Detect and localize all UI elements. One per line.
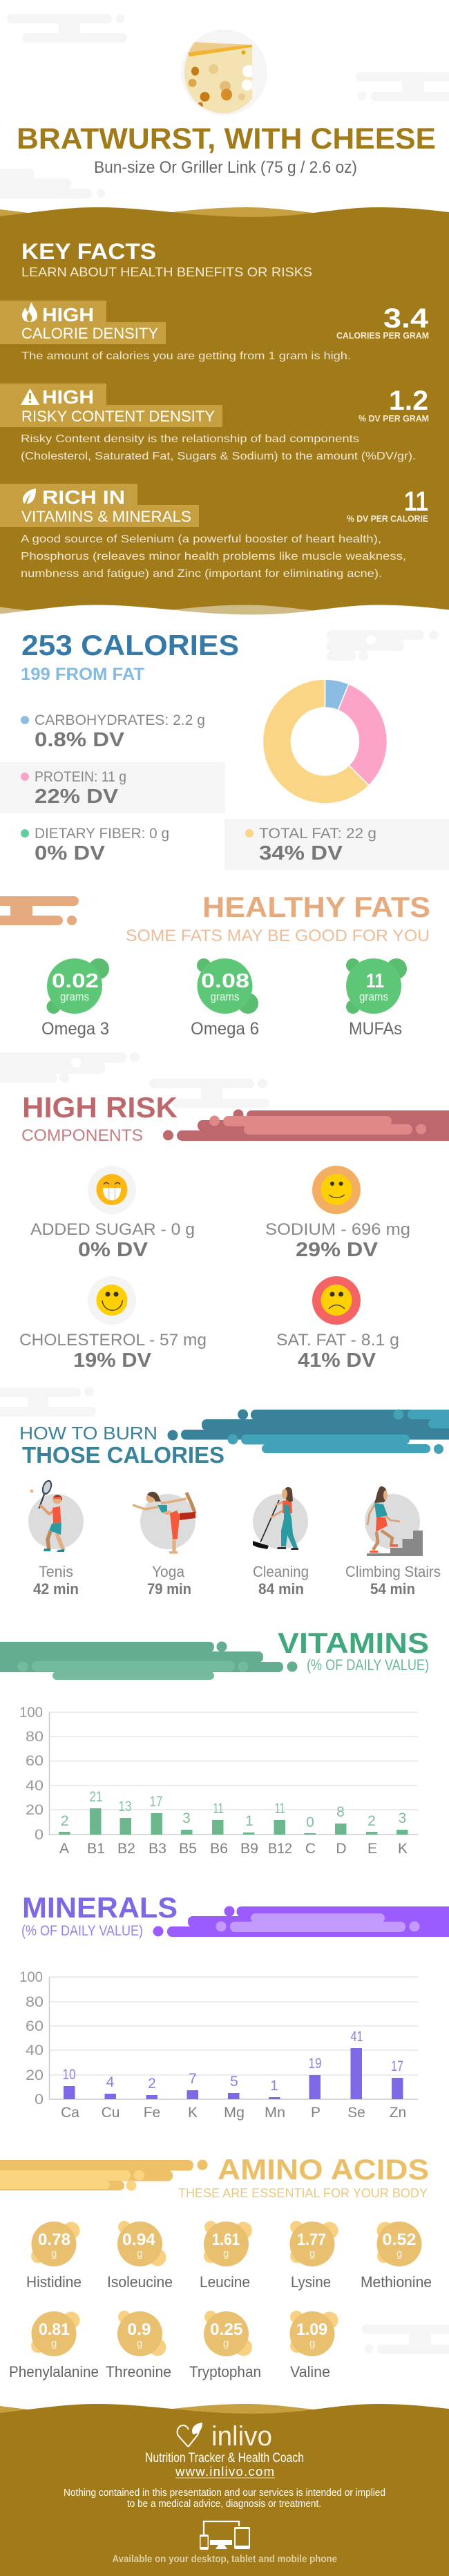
bar chart: minerals: 2 [148,2076,156,2092]
decorative blob [167,1410,449,1454]
item: sodium [265,1166,410,1261]
bar chart: minerals: Fe [144,2105,160,2121]
bar chart: minerals: 80 [26,1994,44,2010]
heading: those calories: THOSE CALORIES [22,1442,224,1468]
badge: leucine: Leucine [200,2273,250,2291]
bar chart: vitamins: 80 [26,1729,44,1745]
activity: cleaning [253,1487,308,1550]
bar chart: vitamins: E [367,1841,377,1857]
legend: protein [0,762,225,813]
bar chart: minerals: Se [347,2105,365,2121]
subheading: components: COMPONENTS [21,1126,143,1145]
heading: calories: 253 CALORIES [21,629,239,661]
bar chart: vitamins: 11 [275,1801,285,1817]
value: 11: 11 [404,486,428,517]
badge: lysine: Lysine [291,2273,331,2291]
subheading: from fat: 199 FROM FAT [21,665,144,684]
value: 3.4: 3.4 [383,303,429,334]
description [21,433,416,462]
icon: warning triangle [21,388,39,405]
subheading: THESE ARE ESSENTIAL FOR YOUR BODY [178,2186,428,2200]
subheading: LEARN ABOUT HEALTH BENEFITS OR RISKS [21,265,312,279]
bar chart: vitamins: B2 [117,1841,135,1857]
decorative blob [153,1906,449,1937]
bar chart: minerals: 10 [62,2067,76,2083]
badge: histidine: 0.78 [38,2231,70,2249]
panel: vitamins [0,1627,429,1857]
logo: inlivo [178,2421,272,2452]
badge: tryptophan: g [223,2338,229,2349]
badge: methionine [361,2222,432,2291]
badge: isoleucine [107,2221,173,2291]
subheading: daily value: (% OF DAILY VALUE) [21,1923,143,1939]
badge: omega 6 [191,958,259,1039]
labels: activity names and minutes: 42 min [33,1580,79,1598]
bar chart: minerals: 40 [26,2043,44,2058]
title: BRATWURST, WITH CHEESE [17,122,436,155]
badge: omega 3: grams [60,990,89,1003]
bar chart: vitamins: 40 [26,1778,44,1794]
panel: key facts [0,207,449,626]
bar chart: vitamins: B1 [87,1841,105,1857]
panel: healthy fats [0,891,430,1039]
fact: risky content density: HIGH [42,386,94,408]
badge: methionine: g [397,2248,402,2260]
legend: dietary fiber: DIETARY FIBER: 0 g [35,826,169,842]
description [21,533,406,580]
labels: activity names and minutes [33,1563,441,1598]
badge: MUFAs: 11 [366,970,384,992]
badge: threonine [106,2311,171,2380]
activity: tennis [28,1479,84,1552]
bar chart: vitamins: B6 [210,1841,228,1857]
badge: threonine: Threonine [106,2363,171,2380]
bar chart: vitamins: 100 [19,1705,43,1721]
bar chart: vitamins: 21 [90,1789,102,1805]
badge: isoleucine: 0.94 [122,2231,156,2249]
fact: calorie density: CALORIE DENSITY [21,325,158,342]
bar chart: vitamins: 20 [26,1802,44,1818]
badge: omega 6: 0.08 [201,970,249,992]
badge: valine: 1.09 [296,2320,327,2339]
labels: activity names and minutes: 84 min [258,1580,304,1598]
badge: leucine: 1.61 [212,2231,240,2249]
bar chart: vitamins: 0 [35,1827,44,1843]
item: saturated fat [276,1276,399,1372]
legend: carbohydrates [21,712,205,751]
item: cholesterol: CHOLESTEROL - 57 mg [19,1331,207,1349]
badge: phenylalanine [9,2311,99,2380]
disclaimer: Nothing contained in this presentation and our services is intended or implied [64,2487,385,2499]
item: added sugar [30,1166,195,1261]
item: cholesterol: 19% DV [73,1349,152,1372]
heading: amino acids: AMINO ACIDS [218,2153,429,2186]
item: saturated fat: 41% DV [298,1349,376,1372]
badge: MUFAs [346,958,407,1039]
bar chart: minerals: 1 [270,2078,278,2094]
bar chart: vitamins [19,1705,418,1857]
disclaimer: to be a medical advice, diagnosis or treatment. [127,2498,321,2510]
legend: dietary fiber [21,826,169,864]
description: Phosphorus (releaves minor health problems like muscle weakness, [21,551,406,562]
bar chart: vitamins: 3 [182,1810,191,1826]
description: (Cholesterol, Saturated Fat, Sugars & Sodium) to the amount (%DV/gr). [21,451,416,462]
badge: valine: Valine [290,2363,330,2380]
bar chart: vitamins: B5 [179,1841,197,1857]
badge: lysine [290,2221,338,2291]
panel: footer [0,2404,449,2576]
bar chart: minerals: Zn [390,2105,406,2121]
icon: devices [200,2521,250,2550]
legend: dietary fiber: 0% DV [35,842,106,864]
item: sodium: SODIUM - 696 mg [265,1220,410,1239]
fact: risky content density: % DV PER GRAM [359,413,429,424]
panel: amino acids [0,2153,432,2380]
legend: carbohydrates: 0.8% DV [35,729,125,751]
badge: methionine: Methionine [361,2273,432,2291]
fact: rich in vitamins and minerals: % DV PER CALORIE [347,513,428,524]
description: A good source of Selenium (a powerful booster of heart health), [21,533,381,545]
decorative blob [163,1110,449,1141]
labels: activity names and minutes: Climbing Stairs [345,1563,441,1580]
bar chart: minerals: 7 [189,2071,197,2087]
fact: calorie density [0,301,429,362]
badge: threonine: g [137,2338,142,2349]
activity: yoga [133,1492,195,1553]
heading: key facts: KEY FACTS [21,239,156,264]
decorative blob [0,896,79,925]
bar chart: vitamins: B9 [240,1841,258,1857]
badge: isoleucine: g [137,2248,142,2260]
bar chart: minerals: 60 [26,2018,44,2034]
badge: lysine: 1.77 [297,2231,326,2249]
badge: leucine [200,2221,252,2291]
bar chart: vitamins: A [59,1841,69,1857]
heading: how to burn: HOW TO BURN [19,1423,157,1443]
bar chart: minerals: K [188,2105,198,2121]
badge: MUFAs: grams [359,990,388,1003]
bar chart: vitamins: 0 [306,1815,314,1830]
bar chart: vitamins: 2 [367,1813,376,1829]
labels: activity names and minutes: 79 min [147,1580,191,1598]
legend: protein: 22% DV [35,786,119,808]
bar chart: minerals: 17 [391,2058,403,2074]
badge: histidine: g [51,2248,57,2260]
badge: isoleucine: Isoleucine [107,2273,173,2291]
bar chart: minerals: 100 [19,1969,43,1985]
bar chart: vitamins: 11 [213,1801,224,1817]
heading: high risk: HIGH RISK [22,1091,178,1124]
fact: rich in vitamins and minerals [0,484,428,580]
fact: rich in vitamins and minerals: VITAMINS & MINERALS [21,508,191,525]
badge: phenylalanine: Phenylalanine [9,2363,99,2380]
bar chart: vitamins: 13 [119,1799,131,1815]
badge: tryptophan [189,2311,261,2380]
bar chart: vitamins: 60 [26,1753,44,1769]
value: 1.2: 1.2 [389,386,428,416]
legend: protein: PROTEIN: 11 g [35,769,126,785]
badge: methionine: 0.52 [383,2231,416,2249]
icon: flame [22,302,37,322]
legend: total fat [224,819,449,870]
disclaimer [64,2487,385,2510]
bar chart: minerals: Mg [224,2105,245,2121]
badge: omega 6: Omega 6 [191,1019,259,1039]
heading: minerals: MINERALS [22,1891,178,1924]
fact: risky content density [0,383,429,462]
badge: omega 6: grams [210,990,239,1003]
badge: tryptophan: Tryptophan [189,2363,261,2380]
labels: activity names and minutes: Cleaning [253,1563,309,1580]
badge: valine: g [309,2338,315,2349]
item: added sugar: ADDED SUGAR - 0 g [30,1220,195,1239]
panel: how to burn those calories [19,1410,449,1598]
labels: activity names and minutes: Tenis [39,1563,73,1580]
bar chart: minerals: Mn [265,2105,285,2121]
bar chart: minerals: P [311,2105,321,2121]
fact: calorie density: CALORIES PER GRAM [336,330,429,341]
badge: phenylalanine: g [51,2338,57,2349]
description: Risky Content density is the relationship of bad components [21,433,359,445]
bar chart: vitamins: C [305,1841,316,1857]
fact: risky content density: RISKY CONTENT DENSITY [21,408,215,425]
panel: minerals [19,1891,449,2121]
badge: histidine: Histidine [26,2273,82,2291]
bar chart: minerals [19,1969,418,2121]
description: numbness and fatigue) and Zinc (important for eliminating acne). [21,568,382,580]
badge: omega 3: Omega 3 [41,1019,109,1039]
badge: omega 3: 0.02 [52,970,99,992]
badge: leucine: g [223,2248,229,2260]
legend: total fat: 34% DV [259,842,343,864]
bar chart: minerals: Ca [61,2105,79,2121]
badge: phenylalanine: 0.81 [39,2320,70,2339]
bar chart: vitamins: 1 [245,1813,254,1829]
bar chart: minerals: Cu [102,2105,120,2121]
item: sodium: 29% DV [296,1239,379,1261]
website link: www.inlivo.com [175,2464,274,2479]
bar chart: vitamins: 3 [399,1810,406,1826]
bar chart: minerals: 19 [308,2056,322,2072]
donut chart [262,679,387,804]
badge: lysine: g [309,2248,315,2260]
tagline: Nutrition Tracker & Health Coach [145,2451,304,2465]
bar chart: vitamins: 2 [61,1813,69,1829]
bar chart: minerals: 20 [26,2067,44,2083]
bar chart: vitamins: 17 [149,1794,163,1810]
bar chart: vitamins: B12 [268,1841,292,1857]
bar chart: minerals: 4 [106,2074,115,2090]
bar chart: vitamins: D [336,1841,347,1857]
bar chart: minerals: 0 [35,2092,44,2108]
bar chart: minerals: 5 [230,2074,238,2090]
subtitle: serving size: Bun-size Or Griller Link (75 g / 2.6 oz) [94,158,357,177]
badge: omega 3 [41,958,109,1039]
decorative blob [0,1642,297,1680]
heading: healthy fats: HEALTHY FATS [202,891,430,923]
activity: climbing stairs [365,1486,423,1556]
logo: inlivo: inlivo [211,2421,272,2452]
item: cholesterol [19,1276,207,1372]
item: added sugar: 0% DV [78,1239,149,1261]
item: saturated fat: SAT. FAT - 8.1 g [276,1331,399,1349]
heading: vitamins: VITAMINS [278,1627,429,1659]
badge: threonine: 0.9 [127,2320,151,2339]
fact: calorie density: HIGH [42,304,94,325]
subheading: SOME FATS MAY BE GOOD FOR YOU [126,927,430,945]
legend: carbohydrates: CARBOHYDRATES: 2.2 g [35,712,205,728]
food photo: cheese in circle [180,30,267,117]
panel: high risk components [19,1091,449,1372]
badge: histidine [26,2222,82,2291]
bar chart: vitamins: 8 [336,1804,345,1820]
badge: MUFAs: MUFAs [349,1019,402,1039]
bar chart: minerals: 41 [351,2029,363,2045]
badge: valine [290,2311,338,2380]
decorative blob [0,2160,207,2190]
bar chart: vitamins: K [398,1841,408,1857]
badge: tryptophan: 0.25 [210,2320,243,2339]
fact: rich in vitamins and minerals: RICH IN [42,486,125,508]
labels: activity names and minutes: Yoga [152,1563,185,1580]
panel: calories [0,629,449,870]
fact: calorie density: The amount of calories you are getting from 1 gram is high. [21,350,351,362]
icon: leaf [23,489,36,504]
labels: activity names and minutes: 54 min [370,1580,415,1598]
legend: total fat: TOTAL FAT: 22 g [259,826,376,842]
availability note: Available on your desktop, tablet and mobile phone [112,2553,337,2565]
bar chart: vitamins: B3 [149,1841,166,1857]
